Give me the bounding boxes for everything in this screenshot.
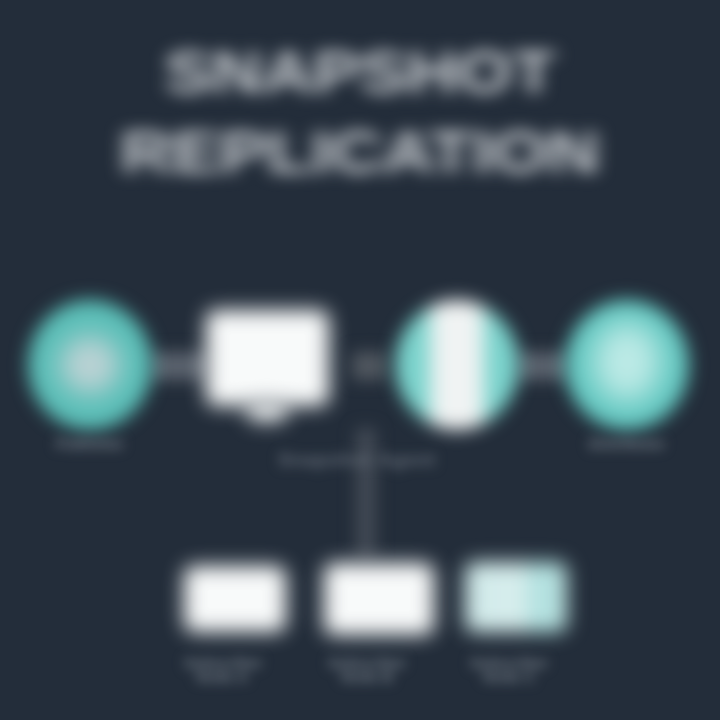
icon: snapshot monitor — [190, 294, 346, 438]
box: subscriber 3 — [465, 562, 567, 632]
box: subscriber 1 — [184, 566, 286, 632]
target icon glyph — [593, 322, 661, 402]
connector: snapshot to distributor — [352, 352, 386, 380]
label: subscriber 1: Node A — [196, 669, 248, 686]
icon: target circle — [565, 300, 689, 430]
monitor screen — [206, 310, 329, 406]
label: subscriber 1: Subscriber — [184, 655, 262, 672]
connector: source to snapshot — [148, 352, 210, 380]
connector: vertical to subscribers — [356, 428, 376, 558]
distributor centre panel — [430, 295, 484, 435]
icon: source circle — [28, 300, 152, 430]
label: subscriber 3: Node C — [483, 669, 535, 686]
label: subscriber 3 — [468, 654, 549, 687]
label: subscriber 2 — [326, 654, 407, 687]
source icon glyph — [60, 336, 120, 394]
connector: distributor to target — [515, 352, 570, 380]
label: target: Distributor — [589, 436, 665, 453]
label: source: Publisher — [56, 436, 124, 453]
label: subscriber 2: Node B — [341, 669, 393, 686]
label: subscriber 1 — [182, 654, 263, 687]
title line 2: REPLICATION — [121, 119, 599, 186]
title — [110, 39, 610, 186]
box: subscriber 2 — [324, 563, 434, 635]
label: subscriber 3: Subscriber — [470, 655, 548, 672]
title line 1: SNAPSHOT — [165, 39, 555, 106]
label: snapshot: Snapshot Agent — [278, 450, 437, 470]
monitor stand — [247, 398, 287, 422]
label: subscriber 2: Subscriber — [328, 655, 406, 672]
icon: distributor circle — [395, 300, 519, 430]
